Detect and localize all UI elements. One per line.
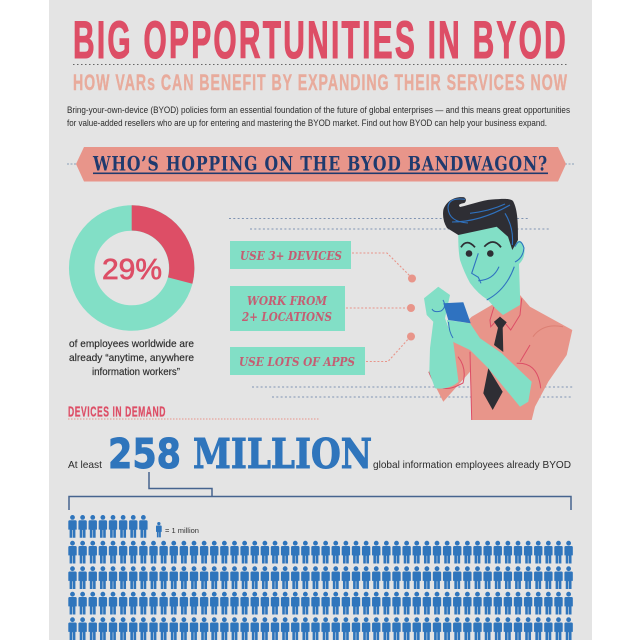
icon: finger lines	[432, 300, 453, 338]
icon: hair highlights	[448, 199, 513, 245]
stat: at least 258 million: At least	[68, 459, 102, 471]
illustration: man using a phone	[424, 197, 572, 420]
stat: at least 258 million: 258	[108, 430, 181, 478]
legend: = 1 million	[165, 526, 199, 535]
pictogram: first row of eight people	[68, 515, 148, 538]
section banner	[67, 147, 574, 182]
icon: shirt	[428, 295, 572, 420]
callout: work from 2+ locations	[230, 286, 345, 331]
heading: devices in demand: DEVICES IN DEMAND	[68, 404, 166, 420]
bracket	[69, 472, 571, 510]
donut caption: information workers”	[92, 366, 180, 378]
donut chart: 29%: 29%	[102, 254, 162, 286]
legend	[156, 522, 199, 537]
donut caption: of employees worldwide are	[69, 338, 194, 350]
pictogram: rows of people	[68, 541, 573, 640]
callout: work from 2+ locations: WORK FROM	[247, 294, 328, 308]
callout: use 3+ devices: USE 3+ DEVICES	[240, 249, 342, 263]
icon: shirt seams	[429, 298, 541, 420]
connectors from callouts to man	[346, 253, 416, 362]
callout: use 3+ devices	[230, 241, 351, 269]
stat: at least 258 million	[68, 430, 571, 478]
icon: left arm and fist	[424, 287, 458, 389]
callout: use lots of apps	[230, 347, 365, 375]
icon: hair	[443, 197, 518, 250]
intro text	[67, 105, 570, 129]
icon: neck and face	[458, 225, 524, 315]
donut caption: already “anytime, anywhere	[69, 352, 194, 364]
donut caption	[69, 338, 194, 378]
icon: phone	[443, 302, 471, 323]
dotted guide lines	[229, 218, 573, 397]
intro text: for value-added resellers who are up for entering and mastering the BYOD market. Find out how BYOD can help your business expand.	[67, 118, 547, 129]
icon: sleeve seam	[533, 326, 563, 337]
stat: at least 258 million: MILLION	[193, 430, 372, 478]
donut chart: 29%	[82, 205, 194, 318]
stat: at least 258 million: global information employees already BYOD	[373, 459, 571, 471]
icon: facial features	[461, 242, 524, 300]
icon: right arm and hand	[447, 320, 532, 407]
callout: use lots of apps: USE LOTS OF APPS	[239, 355, 355, 369]
callout: work from 2+ locations: 2+ LOCATIONS	[241, 310, 332, 324]
icon: tie	[483, 317, 507, 410]
